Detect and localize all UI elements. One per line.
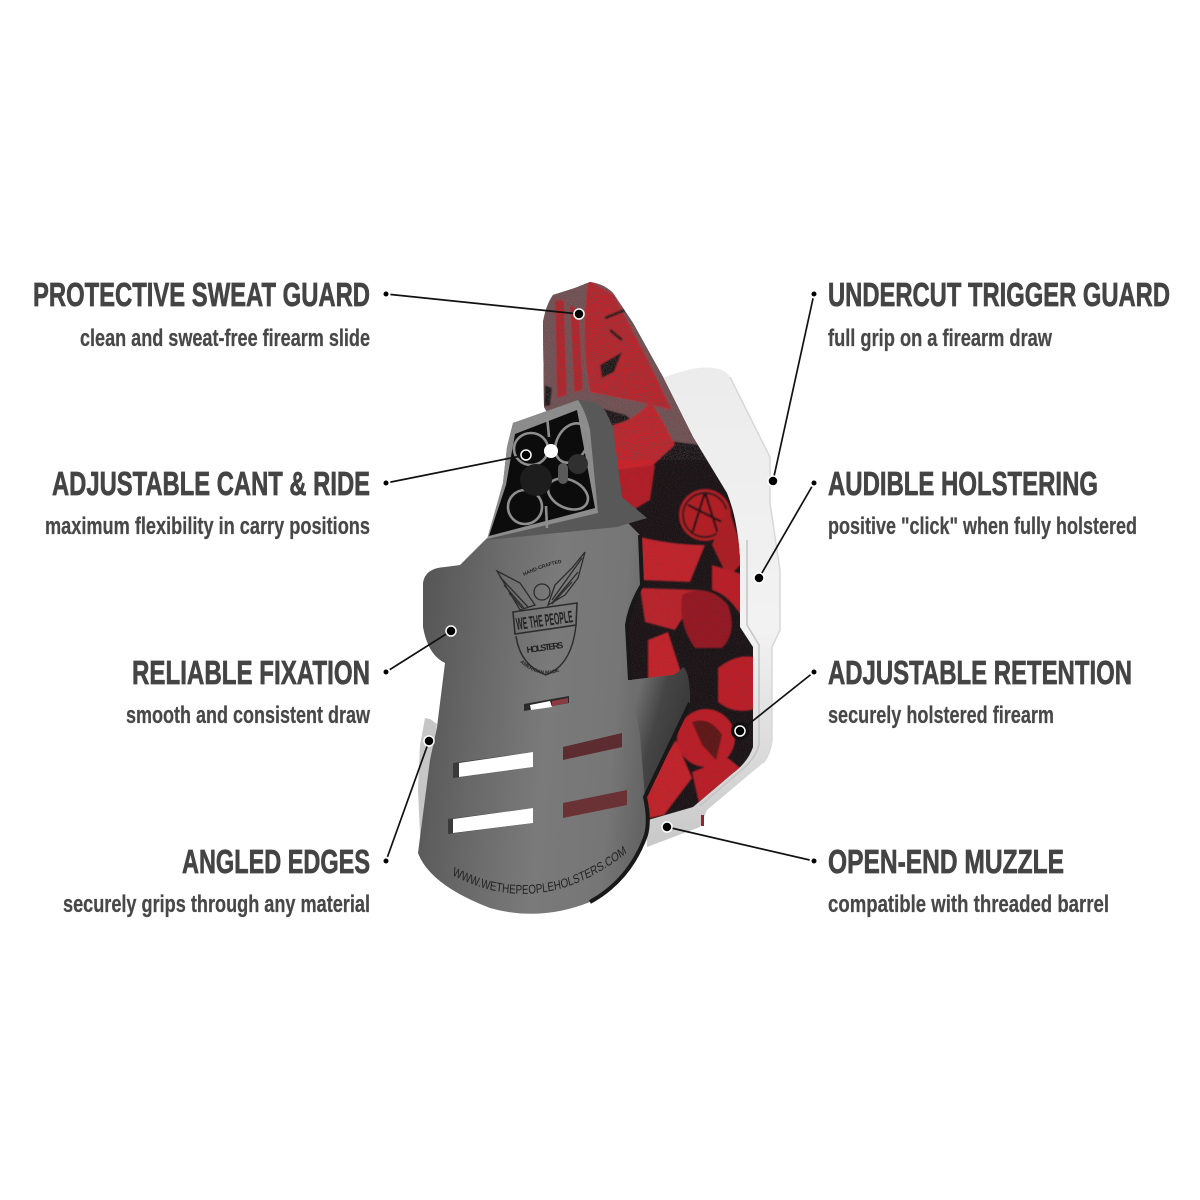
logo top text: HAND-CRAFTED — [522, 560, 562, 576]
description: smooth and consistent draw — [126, 702, 370, 729]
description: clean and sweat-free firearm slide — [80, 325, 370, 352]
description: compatible with threaded barrel — [828, 891, 1109, 918]
angled edge strip — [418, 718, 437, 855]
heading: ADJUSTABLE CANT & RIDE — [52, 466, 370, 503]
logo wings — [497, 552, 585, 610]
holster illustration — [418, 282, 781, 914]
leader line — [382, 736, 434, 864]
heading: AUDIBLE HOLSTERING — [828, 466, 1098, 503]
lobed ribs — [508, 416, 595, 528]
shell outer edge — [730, 377, 780, 763]
red patterned holster body — [543, 282, 753, 820]
heading: PROTECTIVE SWEAT GUARD — [33, 277, 370, 314]
cant screw and hole — [520, 444, 588, 496]
logo — [496, 552, 586, 676]
white holster shell — [640, 368, 780, 847]
paddle dark rim — [590, 535, 690, 902]
upper red field — [584, 280, 672, 410]
leader line — [662, 822, 818, 864]
belt slots — [448, 696, 627, 834]
paddle plate — [418, 522, 690, 914]
upper texture grain — [543, 282, 706, 460]
description: securely holstered firearm — [828, 702, 1054, 729]
lower red shapes — [640, 588, 700, 630]
callout: angled edges — [63, 736, 434, 918]
description: securely grips through any material — [63, 891, 370, 918]
muzzle red tip — [701, 815, 704, 826]
heading: ANGLED EDGES — [182, 844, 370, 881]
adjustment plate — [487, 400, 647, 540]
logo bottom text: AMERICAN MADE — [520, 660, 560, 674]
leader line — [382, 626, 456, 676]
description: full grip on a firearm draw — [828, 325, 1052, 352]
logo holsters text: HOLSTERS — [526, 640, 564, 655]
callout: reliable fixation — [126, 626, 456, 729]
leader line — [382, 450, 531, 486]
grey speckled upper zone — [535, 275, 700, 445]
pattern shapes — [535, 275, 758, 820]
callout: protective sweat guard — [33, 277, 584, 352]
mid red shapes — [612, 403, 676, 470]
holster illustration: WE THE PEOPLE — [515, 607, 574, 634]
leader line — [768, 290, 818, 486]
shell inner edge — [700, 540, 759, 806]
leader line — [735, 668, 818, 736]
lower texture grain — [617, 460, 753, 819]
callout: adjustable cant and ride — [45, 450, 531, 540]
description: maximum flexibility in carry positions — [45, 513, 370, 540]
leader line — [382, 290, 584, 319]
heading: OPEN-END MUZZLE — [828, 844, 1064, 881]
adjustment window — [489, 410, 595, 536]
callout: audible holstering — [754, 466, 1137, 583]
logo shield — [516, 625, 576, 675]
callout: open-end muzzle — [662, 822, 1109, 918]
callout: undercut trigger guard — [768, 277, 1170, 486]
paddle dark wing — [630, 667, 690, 797]
website text: WWW.WETHEPEOPLEHOLSTERS.COM — [454, 846, 626, 894]
plate front face — [487, 400, 598, 539]
callout: adjustable retention — [735, 655, 1132, 736]
logo banner — [513, 603, 577, 634]
leader line — [754, 480, 818, 583]
heading: RELIABLE FIXATION — [132, 655, 370, 692]
